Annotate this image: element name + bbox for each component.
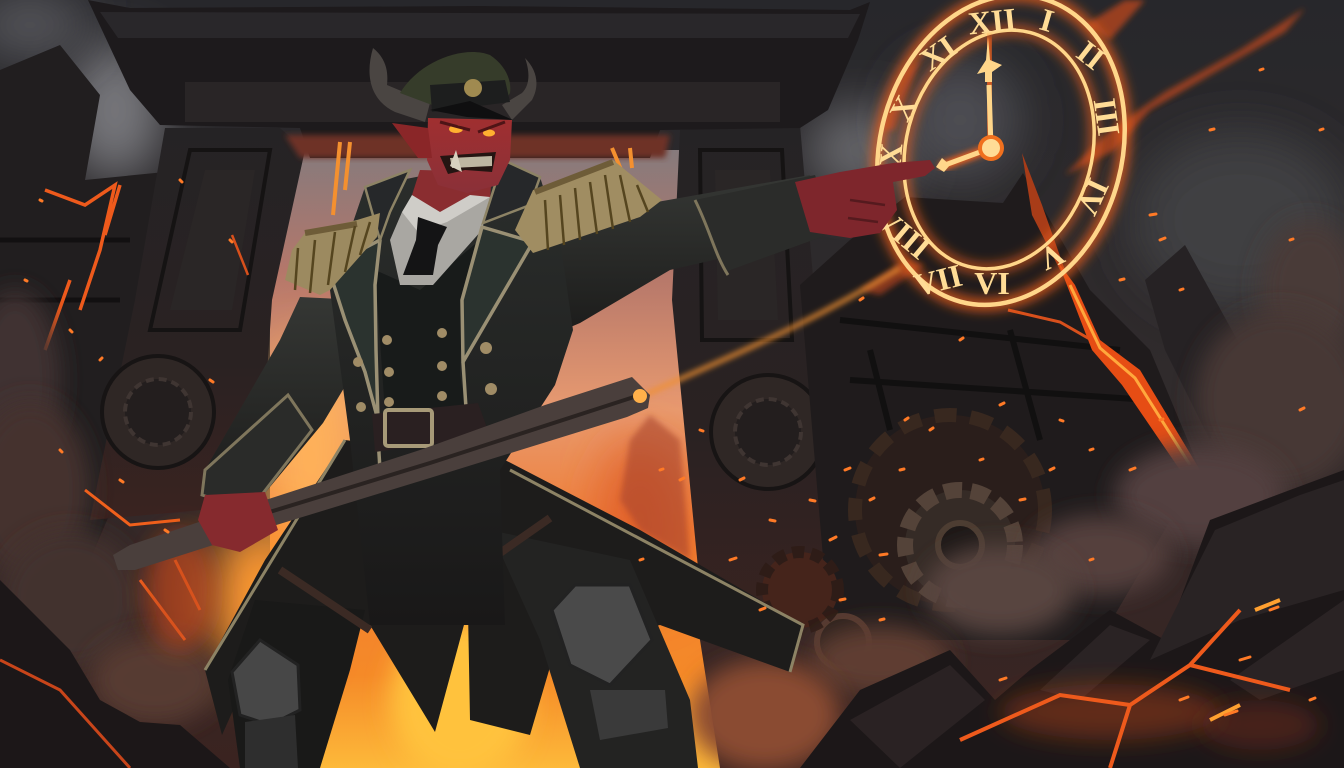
gate roof	[88, 0, 870, 215]
belt	[372, 403, 490, 452]
roman numerals: VII	[910, 257, 966, 303]
collars	[365, 160, 540, 240]
roman numerals: II	[1070, 33, 1112, 77]
gate right pillar	[672, 125, 832, 640]
roman numerals: XI	[913, 28, 963, 78]
head	[392, 118, 512, 193]
roman numerals: III	[1087, 96, 1127, 138]
carved wheel	[102, 356, 214, 468]
left fist	[198, 492, 278, 552]
epaulettes	[285, 160, 662, 295]
mouth	[440, 152, 496, 174]
ear	[392, 123, 432, 158]
officer figure	[113, 48, 935, 768]
torso coat	[330, 160, 573, 625]
rocks bottom right	[800, 470, 1344, 768]
roman numerals: V	[1034, 236, 1070, 278]
roman numerals: IX	[871, 142, 909, 180]
lava stream on right wall	[1022, 153, 1200, 470]
club	[113, 377, 650, 570]
rocks bottom left	[0, 580, 230, 768]
roman numerals: X	[882, 89, 924, 127]
gears	[762, 415, 1045, 668]
coat skirt	[205, 440, 803, 735]
smoke left	[0, 290, 220, 725]
lava cracks	[960, 610, 1290, 768]
hands	[198, 160, 935, 552]
lava glow	[1000, 684, 1220, 740]
roman numerals	[868, 1, 1127, 303]
pointing arm	[520, 175, 835, 340]
fire wisps behind clock	[860, 0, 1305, 295]
eyes	[449, 125, 463, 133]
left knee guard	[232, 640, 300, 725]
glowing lintel	[285, 135, 670, 158]
beam from club	[645, 268, 900, 395]
clock glow and rings	[843, 0, 1159, 333]
carved wheel	[711, 375, 825, 489]
neck, shirt and tie	[390, 170, 492, 285]
left arm	[200, 297, 360, 505]
pointing hand	[795, 160, 935, 238]
left ruined wall	[0, 45, 165, 560]
roman numerals: XII	[966, 1, 1018, 41]
gate left pillar	[90, 128, 305, 520]
clock hands	[936, 37, 1004, 172]
clock	[843, 0, 1159, 333]
buttons	[353, 328, 497, 412]
legs	[228, 518, 698, 768]
gate opening with molten glow	[210, 150, 720, 768]
waistcoat	[375, 240, 480, 412]
roman numerals: I	[1036, 1, 1058, 39]
horns	[369, 48, 536, 122]
roman numerals: IV	[1069, 173, 1117, 221]
right ruined temple wall	[800, 173, 1240, 640]
roman numerals: VI	[974, 265, 1010, 301]
officer cap	[400, 52, 513, 120]
roman numerals: VIII	[868, 200, 938, 266]
smoke right	[690, 220, 1344, 768]
lapels	[328, 227, 533, 470]
right knee guard	[552, 585, 652, 685]
